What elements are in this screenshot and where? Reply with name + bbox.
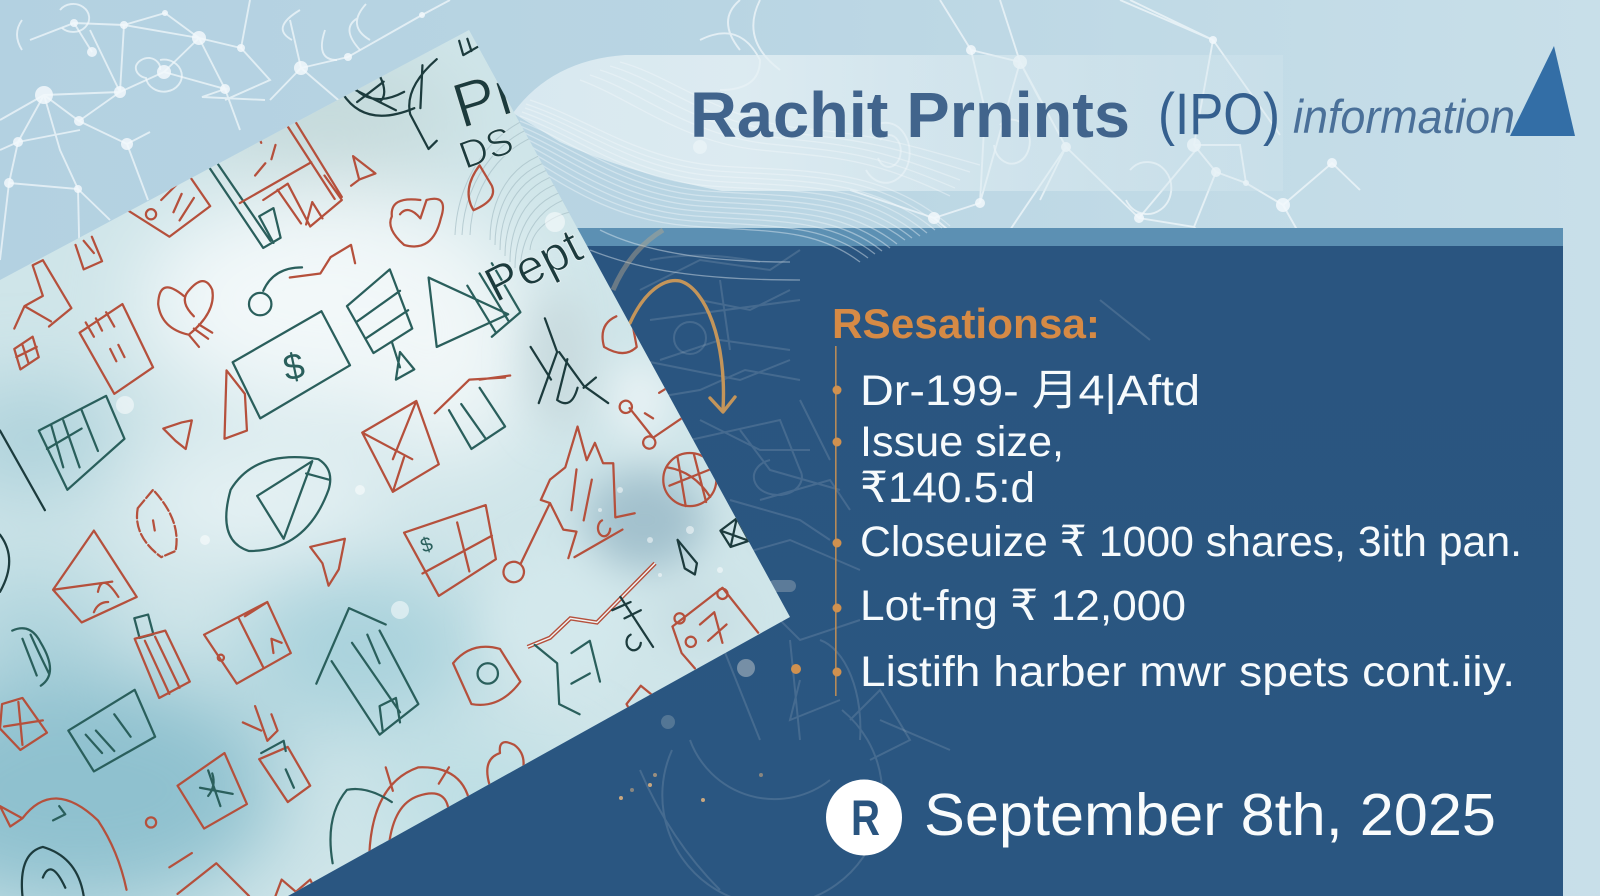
icon: usb (134, 615, 190, 698)
bullet list: Listifh harber mwr spets cont.iiy. (860, 648, 1515, 696)
icon: mountain (504, 427, 635, 582)
icon: red rounded card (672, 588, 758, 668)
icon: phone card (80, 304, 153, 394)
bullet list: Lot-fng ₹ 12,000 (860, 582, 1186, 630)
icon: helmet (22, 847, 84, 896)
icon: big building (316, 608, 418, 735)
icon: bottom frame (169, 853, 249, 896)
fingerprint waves over band (520, 62, 980, 280)
icon: heart blob (390, 199, 443, 246)
icon: tent house (429, 263, 520, 347)
icon: curl (330, 789, 392, 863)
icon: dollar table (404, 505, 496, 596)
icon: money card (233, 311, 350, 418)
icon: whale (0, 798, 127, 890)
icon: flower (627, 686, 663, 715)
bullet rail (832, 346, 842, 696)
faint doodles on panel (640, 250, 1150, 896)
icon: gear ring (369, 767, 471, 878)
icon: drop (469, 165, 493, 210)
icon: temple (209, 122, 342, 248)
bullet list (860, 367, 1522, 696)
bullet list: ₹140.5:d (860, 464, 1035, 512)
icon: knot (603, 314, 637, 353)
icon: triangle (351, 156, 376, 186)
text doodle: Pr: Pri (445, 52, 539, 142)
title band (513, 55, 1283, 191)
faint arc (613, 230, 663, 290)
icon: small ring (146, 817, 156, 828)
icon: bottle (243, 706, 310, 802)
icon: small house (435, 376, 510, 449)
icon: red house (53, 531, 137, 622)
bullet list: Issue size, (860, 418, 1064, 466)
icon: edge line (0, 431, 45, 592)
icon: money card: $ (280, 344, 308, 389)
background network pattern (0, 0, 1360, 290)
icon: cart (620, 383, 682, 449)
icon: dollar table: $ (418, 533, 436, 558)
icon: cloud (487, 742, 524, 789)
icon: key (12, 628, 50, 686)
date badge (826, 780, 902, 856)
icon: server (347, 269, 414, 380)
title (690, 79, 1515, 151)
paper base texture (0, 0, 800, 896)
icon: frame (178, 753, 247, 829)
icon: zig arrow (14, 260, 71, 329)
date badge: R (851, 790, 880, 846)
icon: rune marks (612, 597, 653, 650)
icon: window (14, 337, 39, 369)
icon: upper house fragment (459, 39, 478, 55)
fingerprint on paper (454, 122, 569, 268)
icon: circle wave (249, 245, 355, 315)
paper sheet with doodles (0, 0, 800, 896)
icon: drum (453, 647, 520, 705)
date: September 8th, 2025 (924, 782, 1496, 848)
icon: rising arrow (528, 563, 655, 647)
icon: book (68, 690, 155, 771)
icon: folder (39, 396, 124, 490)
bullet list: Dr-199- 月4|Aftd (860, 367, 1200, 415)
text doodle: DS: DS (454, 119, 519, 178)
title: Rachit Prnints (690, 79, 1130, 151)
icon: arrow star (310, 539, 345, 586)
bullet list: Closeuize ₹ 1000 shares, 3ith pan. (860, 518, 1522, 566)
title: (IPO) (1158, 82, 1280, 147)
icon: cursor (678, 540, 697, 574)
icon: triangle logo (1510, 46, 1575, 136)
icon: bulb heart (158, 281, 213, 347)
icon: house two (204, 602, 291, 684)
heading: orange: RSesationsa: (832, 300, 1100, 347)
icon: squiggle five (535, 641, 600, 714)
icon: small envelope (720, 518, 749, 547)
panel top stripe (250, 228, 1563, 246)
decorative dots on panel (619, 580, 801, 802)
icon: tag (128, 173, 210, 237)
icon: tag outline (224, 370, 247, 439)
icon: scissors figure (531, 318, 608, 403)
icon: paw (76, 237, 102, 269)
icon: crown (276, 880, 318, 896)
icon: cube (0, 698, 47, 750)
icon: oval with triangle (226, 457, 330, 551)
panel: key details (250, 228, 1563, 896)
icon: star (163, 420, 192, 449)
arrow: orange curved (630, 281, 735, 412)
icon: ball (663, 453, 716, 506)
paper highlight dots (116, 212, 723, 619)
text doodle: Pept: Pept (476, 219, 591, 313)
icon: leaf (137, 490, 177, 557)
title: information (1293, 90, 1515, 143)
icon: tree (343, 59, 437, 149)
icon: envelope (362, 401, 439, 492)
